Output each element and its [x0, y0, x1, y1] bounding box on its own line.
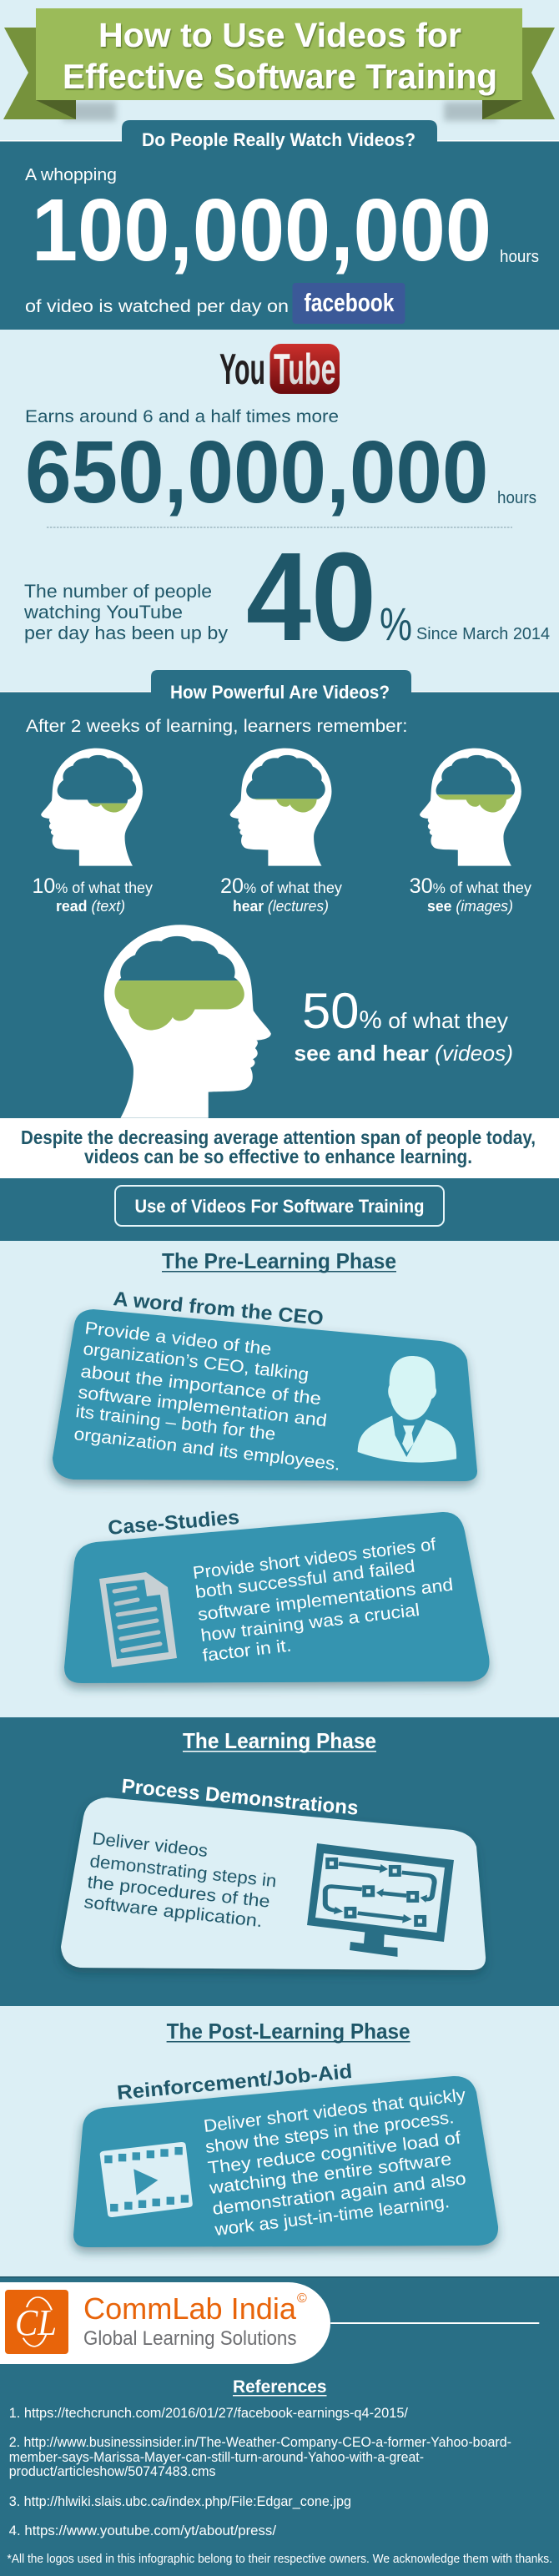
ceo card text — [73, 1318, 341, 1475]
case-studies text: factor in it. — [201, 1636, 292, 1666]
label: 20 percent: 20% of what they — [220, 875, 342, 898]
icon: youtube logo: Tube — [274, 345, 335, 394]
panel: learning phase — [0, 1717, 559, 2006]
heading: post-learning phase: The Post-Learning Phase — [167, 2019, 410, 2044]
callout: attention span: videos can be so effective to enhance learning. — [84, 1146, 472, 1167]
reinforcement text — [203, 2085, 467, 2240]
panel: use of videos button band: Use of Videos For Software Training — [135, 1196, 424, 1217]
reinforcement text: Deliver short videos that quickly — [203, 2085, 467, 2136]
process text: software application. — [83, 1893, 264, 1931]
heading: pre-learning phase: The Pre-Learning Phase — [162, 1248, 396, 1273]
panel: ceo card — [53, 1309, 477, 1481]
label: 10 percent — [32, 875, 153, 915]
label: 10 percent: 10% of what they — [32, 875, 153, 898]
icon: youtube logo: You — [219, 345, 265, 394]
panel: how powerful — [0, 670, 559, 1118]
process text: Deliver videos — [91, 1829, 209, 1861]
references list: 3. http://hlwiki.slais.ubc.ca/index.php/File:Edgar_cone.jpg — [9, 2494, 351, 2509]
heading: references: References — [233, 2377, 327, 2397]
reinforcement text: work as just-in-time learning. — [213, 2192, 451, 2240]
label: 30 percent: 30% of what they — [410, 875, 531, 898]
big number: 100,000,000: 100,000,000 — [32, 181, 491, 280]
ceo card text: about the importance of the — [79, 1362, 322, 1409]
label: 50 percent: see and hear (videos) — [294, 1041, 513, 1066]
text: after 2 weeks: After 2 weeks of learning, learners remember: — [26, 717, 408, 736]
icon: youtube logo — [219, 344, 340, 394]
title text — [63, 16, 497, 96]
text: since march 2014: Since March 2014 — [416, 625, 550, 643]
label: 50 percent — [294, 983, 513, 1066]
panel: facebook stat — [0, 120, 559, 330]
panel: footer — [0, 2276, 559, 2576]
process text — [83, 1829, 278, 1931]
case-studies text: Provide short videos stories of — [192, 1535, 437, 1583]
text: number of people: per day has been up by — [24, 623, 228, 643]
reinforcement text: watching the entire software — [208, 2150, 452, 2198]
panel: reinforcement card — [73, 2076, 498, 2247]
references list — [9, 2406, 511, 2538]
ceo card text: organization and its employees. — [73, 1424, 341, 1475]
text: watched per day: of video is watched per day on — [25, 297, 289, 316]
icon: head 20 percent — [230, 748, 332, 866]
references list: 2. http://www.businessinsider.in/The-Weather-Company-CEO-a-former-Yahoo-board- — [9, 2435, 511, 2450]
ceo card text: software implementation and — [77, 1383, 328, 1430]
heading: a word from the ceo: A word from the CEO — [112, 1288, 325, 1330]
icon: document — [99, 1572, 177, 1667]
title text: How to Use Videos for — [98, 16, 461, 54]
big number: 650,000,000: 650,000,000 — [25, 423, 489, 522]
references list: product/articleshow/50747483.cms — [9, 2464, 216, 2479]
label: 20 percent: hear (lectures) — [233, 898, 329, 915]
text: hours: hours — [500, 248, 539, 266]
callout: attention span — [0, 1118, 559, 1178]
label: 20 percent — [220, 875, 342, 915]
heading: how powerful: How Powerful Are Videos? — [170, 682, 390, 703]
ceo card text: Provide a video of the — [83, 1318, 273, 1359]
icon: facebook logo: facebook — [304, 288, 395, 317]
reinforcement text: show the steps in the process. — [204, 2108, 455, 2157]
references list: member-says-Marissa-Mayer-can-still-turn-around-Yahoo-with-a-great- — [9, 2450, 424, 2465]
icon: facebook logo — [292, 283, 405, 324]
case-studies text: how training was a crucial — [199, 1601, 421, 1646]
panel: use of videos button band — [0, 1178, 559, 1241]
reinforcement text: demonstration again and also — [211, 2169, 467, 2219]
logo: commlab india — [0, 2282, 330, 2364]
case-studies text: software implementations and — [197, 1575, 454, 1625]
case-studies text: both successful and failed — [194, 1557, 416, 1602]
title ribbon — [3, 8, 555, 121]
heading: reinforcement: Reinforcement/Job-Aid — [116, 2060, 353, 2105]
title text: Effective Software Training — [63, 57, 497, 96]
case-studies text — [192, 1535, 454, 1666]
logo: commlab india: CL — [15, 2302, 57, 2343]
text: a whopping: A whopping — [25, 166, 117, 184]
label: 50 percent: 50% of what they — [302, 983, 508, 1039]
references list: 4. https://www.youtube.com/yt/about/press/ — [9, 2523, 276, 2538]
big number: 40 percent: % — [380, 597, 412, 650]
ceo card text: organization’s CEO, talking — [82, 1339, 310, 1384]
heading: learning phase: The Learning Phase — [183, 1728, 376, 1753]
label: 10 percent: read (text) — [56, 898, 125, 915]
heading: process demonstrations: Process Demonstrations — [120, 1775, 360, 1820]
text: number of people: watching YouTube — [23, 602, 183, 623]
panel: case-studies card — [64, 1512, 489, 1683]
big number: 40 percent: 40 — [246, 526, 376, 667]
references list: 1. https://techcrunch.com/2016/01/27/facebook-earnings-q4-2015/ — [9, 2406, 408, 2421]
logo: commlab india: CommLab India — [83, 2291, 297, 2326]
icon: monitor with process flow — [307, 1843, 454, 1957]
label: 30 percent: see (images) — [427, 898, 513, 915]
ceo card text: its training – both for the — [74, 1402, 276, 1444]
heading: do people watch: Do People Really Watch Videos? — [142, 129, 415, 150]
label: 30 percent — [410, 875, 531, 915]
text: number of people — [23, 581, 228, 643]
icon: executive — [358, 1356, 456, 1463]
icon: large head 50 percent — [103, 925, 271, 1118]
logo: commlab india: © — [297, 2291, 307, 2306]
reinforcement text: They reduce cognitive load of — [207, 2128, 462, 2178]
process text: demonstrating steps in — [88, 1852, 278, 1891]
card: process demonstrations — [61, 1797, 486, 1970]
logo: commlab india: Global Learning Solutions — [83, 2327, 297, 2350]
icon: head 10 percent — [41, 748, 143, 866]
text: number of people: The number of people — [24, 581, 212, 602]
icon: video film — [100, 2142, 193, 2217]
text: earns around: Earns around 6 and a half times more — [25, 407, 339, 426]
icon: head 30 percent — [420, 748, 521, 866]
process text: the procedures of the — [86, 1873, 271, 1912]
text: hours: hours — [497, 489, 536, 507]
heading: case-studies: Case-Studies — [107, 1506, 240, 1540]
